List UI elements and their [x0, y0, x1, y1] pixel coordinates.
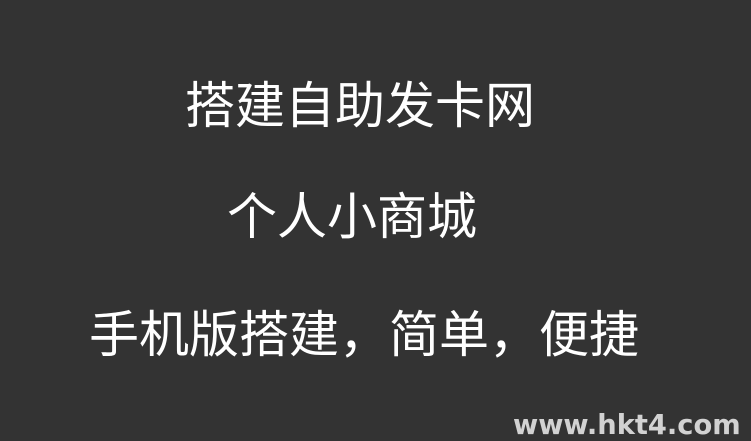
watermark: www.hkt4.com — [513, 410, 741, 441]
heading: line 2: 个人小商城 — [227, 189, 477, 245]
heading: line 1: 搭建自助发卡网 — [185, 78, 535, 134]
heading: line 3: 手机版搭建，简单，便捷 — [89, 307, 639, 363]
